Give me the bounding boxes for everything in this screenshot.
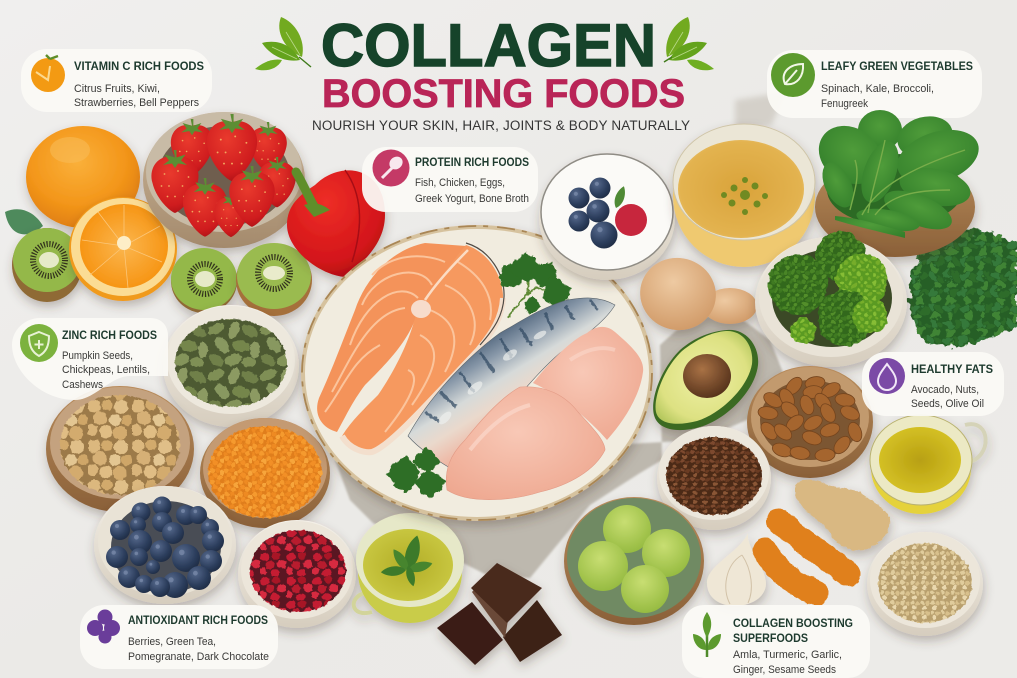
amla bowl [564,497,704,625]
sesame bowl [867,532,983,636]
callout: leafy greens: Fenugreek [821,98,868,110]
callout: antioxidant: Berries, Green Tea, [128,636,216,648]
bone broth bowl [673,124,815,267]
chicken breasts [446,327,643,500]
pumpkin seed bowl [163,305,299,427]
olive oil cup [870,415,986,514]
callout: superfoods: Ginger, Sesame Seeds [733,664,836,676]
callout: protein: Fish, Chicken, Eggs, [415,177,505,189]
orange [26,126,140,228]
ginger [795,480,890,550]
callout: protein: PROTEIN RICH FOODS [415,157,529,169]
kale [909,229,1017,346]
cloth under plate [335,314,788,578]
broccoli bowl [755,231,907,367]
strawberry bowl [143,112,305,248]
callout: vitamin C: Strawberries, Bell Peppers [74,97,199,109]
callout: vitamin C [21,49,212,112]
garlic [707,533,766,606]
callout: superfoods: SUPERFOODS [733,633,808,645]
panel: leafy greens [755,110,1017,367]
panel: protein foods [301,124,815,521]
callout: healthy fats [862,352,1004,416]
parsley bottom [386,447,446,499]
icon: leaf [771,53,815,97]
panel: superfoods [564,480,983,636]
callout: protein [362,147,538,212]
subtitle: NOURISH YOUR SKIN, HAIR, JOINTS & BODY NATURALLY [312,118,690,133]
panel: vitamin C foods [5,112,385,316]
plate [301,225,653,521]
flax bowl [657,426,771,530]
callout: leafy greens [767,50,982,118]
avocado [653,330,758,430]
icon: sprout [693,612,721,657]
title leaves left [255,17,311,70]
lentil bowl [200,418,330,528]
salmon steak [317,243,504,452]
callout: antioxidant: ANTIOXIDANT RICH FOODS [128,615,268,627]
callout: leafy greens: LEAFY GREEN VEGETABLES [821,61,973,73]
callout: antioxidant [80,605,278,669]
leaf [5,209,43,234]
kiwi left [12,228,82,302]
panel: zinc foods [46,305,330,528]
heading: collagen: COLLAGEN [321,12,656,79]
callout: superfoods: Amla, Turmeric, Garlic, [733,649,842,661]
callout: leafy greens: Spinach, Kale, Broccoli, [821,83,934,95]
callout: zinc: ZINC RICH FOODS [62,330,157,342]
icon: shield [20,324,58,362]
callout: healthy fats: Avocado, Nuts, [911,384,979,396]
parsley top [492,252,576,318]
eggs [632,249,757,339]
callout: healthy fats: HEALTHY FATS [911,364,993,376]
turmeric [765,521,848,593]
panel: healthy fats [653,330,986,530]
callout: healthy fats: Seeds, Olive Oil [911,398,984,410]
callout: antioxidant: Pomegranate, Dark Chocolate [128,651,269,663]
callout: zinc: Cashews [62,379,103,391]
callout: zinc [12,318,168,400]
nut bowl [747,366,873,478]
orange half [69,197,177,301]
kiwi slices [171,248,237,313]
pomegranate bowl [238,520,356,628]
icon: oil drop [869,358,905,394]
dark chocolate [437,563,562,665]
heading: boosting foods: BOOSTING FOODS [322,72,685,116]
callout: vitamin C: VITAMIN C RICH FOODS [74,61,204,73]
panel: antioxidant foods [94,486,562,665]
callout: superfoods: COLLAGEN BOOSTING [733,618,853,630]
mackerel [408,298,615,468]
blueberry bowl [94,486,236,604]
icon: orange [31,55,65,92]
chickpea bowl [46,386,194,512]
callout: zinc: Chickpeas, Lentils, [62,364,150,376]
title block [255,12,714,133]
callout: zinc: Pumpkin Seeds, [62,350,133,362]
yogurt bowl [539,154,675,280]
callout: vitamin C: Citrus Fruits, Kiwi, [74,83,160,95]
callout: superfoods [682,605,870,678]
icon: berries [87,610,120,644]
title leaves right [664,17,714,70]
callout: protein: Greek Yogurt, Bone Broth [415,193,529,205]
green tea cup [354,513,464,623]
icon: drumstick [372,150,410,186]
spinach bowl [807,110,986,257]
bell pepper [287,170,385,277]
